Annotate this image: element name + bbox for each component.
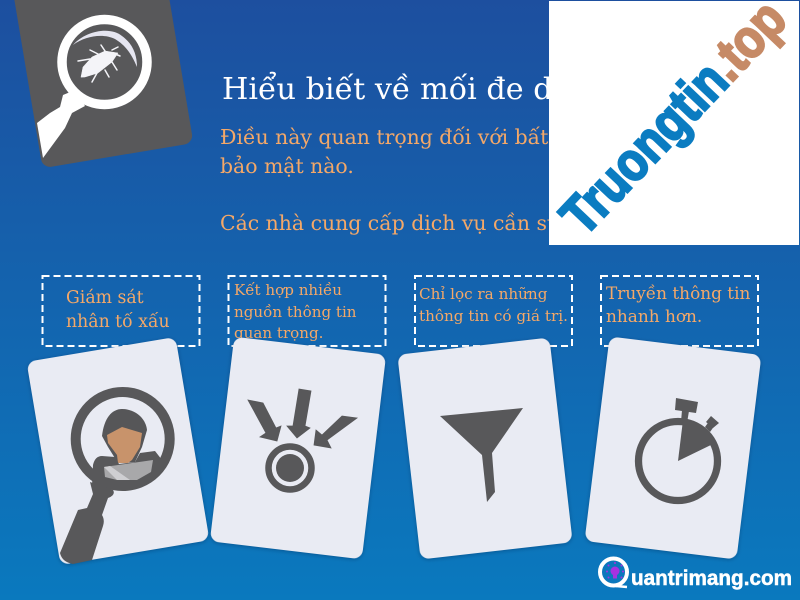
icon: hacker face — [107, 427, 142, 463]
label box 3: Chỉ lọc ra những — [419, 285, 548, 303]
icon: magnifier ring — [62, 20, 147, 104]
label box 2: quan trọng. — [234, 324, 323, 342]
icon: magnifier ring — [76, 392, 170, 486]
label box 3: thông tin có giá trị. — [419, 307, 568, 325]
title: Hiểu biết về mối đe dọa — [222, 71, 589, 107]
label box 1 — [42, 276, 200, 346]
icon: logo ring — [600, 558, 627, 587]
icon: scarf — [104, 460, 153, 480]
icon: magnifier handle — [37, 90, 85, 158]
icon: light bulb — [606, 562, 624, 578]
icon: arrow right — [314, 416, 357, 448]
icon: arrow top — [287, 389, 311, 438]
text block: intro: Điều này quan trọng đối với bất kỳ giải pháp — [220, 125, 681, 149]
panel: card 4 stopwatch — [585, 336, 761, 560]
panel: card 3 filter — [397, 338, 573, 559]
label box 4 — [601, 276, 758, 346]
logo text: uantrimang.com — [631, 566, 792, 590]
icon: bug — [78, 45, 120, 82]
icon: funnel — [440, 408, 523, 502]
text block: intro — [220, 125, 681, 235]
icon: hacker shoulders — [92, 451, 162, 488]
icon: lens highlight — [73, 31, 137, 67]
icon: stopwatch — [638, 398, 719, 500]
icon: arrow left — [248, 400, 281, 441]
label box 3 — [415, 276, 572, 346]
panel: card 1 hacker under magnifier — [27, 337, 209, 565]
panel: card 2 combine sources — [210, 337, 386, 559]
icon: target — [268, 446, 312, 490]
label box 1: Giám sát — [66, 288, 144, 308]
label box 2: nguồn thông tin — [234, 303, 357, 321]
label box 2: Kết hợp nhiều — [234, 281, 342, 299]
label box 2 — [228, 276, 386, 346]
icon: hacker hood — [102, 409, 147, 463]
text block: intro: bảo mật nào. — [220, 154, 354, 178]
text block: intro: Các nhà cung cấp dịch vụ cần sử dụng — [220, 211, 619, 235]
label box 1: nhân tố xấu — [66, 312, 170, 332]
logo: Quantrimang.com — [600, 558, 792, 590]
icon: magnifier handle — [60, 482, 114, 564]
panel: header card with bug magnifier — [9, 0, 193, 168]
label box 4: nhanh hơn. — [606, 306, 702, 326]
label box 4: Truyền thông tin — [606, 283, 750, 303]
